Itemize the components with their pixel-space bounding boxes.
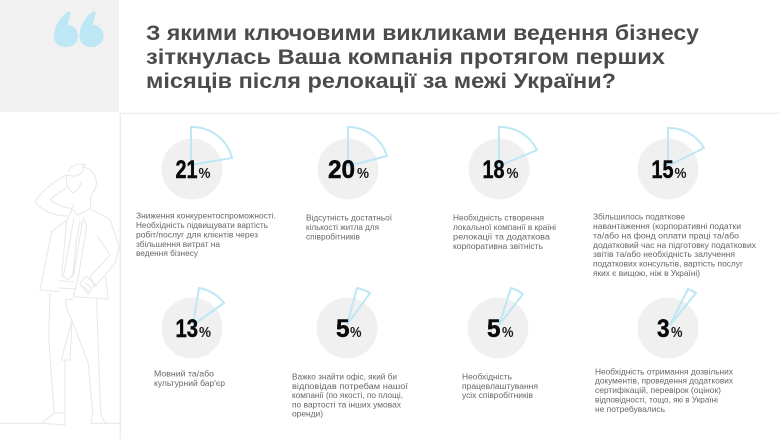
text block: 15%: додатковий час на підготовку податкових bbox=[593, 240, 757, 250]
chart: 15% sector over circle: % bbox=[674, 165, 686, 182]
text block: 5% office: по вартості та інших умовах bbox=[292, 400, 402, 410]
chart: 18% sector over circle: % bbox=[506, 165, 518, 182]
item: 15% bbox=[593, 128, 757, 278]
chart: 13% sector over circle: 13 bbox=[176, 315, 198, 343]
text block: 18%: Необхідність створення bbox=[453, 212, 544, 222]
text block: 5% employment bbox=[462, 372, 538, 400]
text block: 21% bbox=[136, 210, 276, 258]
text block: 5% office: Важко знайти офіс, який би bbox=[292, 372, 397, 382]
chart: 15% sector over circle: 15 bbox=[652, 156, 674, 184]
text block: 15% bbox=[593, 212, 757, 278]
chart: 13% sector over circle bbox=[162, 288, 224, 358]
text block: 13% bbox=[154, 368, 225, 388]
text block: 5% employment: Необхідність bbox=[462, 372, 513, 382]
text block: 18%: корпоративна звітність bbox=[453, 241, 544, 251]
text block: 3%: сертифікацій, перевірок (оцінок) bbox=[595, 385, 721, 395]
text block: 21%: Необхідність підвищувати вартість bbox=[136, 220, 269, 230]
chart: 18% sector over circle: 18 bbox=[482, 156, 505, 184]
text block: 5% office: компанії (по якості, по площі, bbox=[292, 390, 403, 400]
chart: 3% sector over circle: 3 bbox=[657, 315, 670, 343]
item: 18% bbox=[453, 127, 556, 251]
text block: 15%: яких є вищою, ніж в Україні) bbox=[593, 268, 700, 278]
text block: 15%: Збільшилось податкове bbox=[593, 212, 685, 222]
chart: 13% sector over circle: % bbox=[199, 324, 211, 341]
chart: 5% sector over circle bbox=[468, 288, 528, 358]
text block: 21%: Зниження конкурентоспроможності. bbox=[136, 210, 276, 220]
chart: 5% sector over circle: % bbox=[502, 324, 514, 341]
chart: 21% sector over circle: % bbox=[198, 165, 210, 182]
text block: 3% bbox=[595, 366, 734, 414]
chart: 3% sector over circle: % bbox=[671, 324, 682, 341]
text block: 15%: навантаження (корпоративні податки bbox=[593, 221, 741, 231]
title bbox=[146, 22, 699, 93]
chart: 5% sector over circle: 5 bbox=[336, 315, 350, 343]
chart: 20% sector over circle: 20 bbox=[328, 156, 355, 184]
icon: quotation marks bbox=[54, 11, 104, 47]
chart: 21% sector over circle bbox=[162, 127, 232, 200]
text block: 5% office: відповідав потребам нашої bbox=[292, 381, 409, 391]
text block: 18% bbox=[453, 212, 556, 251]
title: місяців після релокації за межі України? bbox=[146, 70, 616, 93]
item: 5% employment bbox=[462, 288, 538, 400]
chart: 20% sector over circle bbox=[318, 127, 387, 200]
text block: 3%: Необхідність отримання дозвільних bbox=[595, 366, 734, 376]
text block: 21%: ведення бізнесу bbox=[136, 248, 199, 258]
text block: 5% office: оренди) bbox=[292, 408, 323, 418]
text block: 5% employment: працевлаштування bbox=[462, 381, 538, 391]
chart: 20% sector over circle: % bbox=[357, 165, 369, 182]
chart: 18% sector over circle bbox=[468, 127, 537, 200]
chart: 3% sector over circle bbox=[638, 289, 698, 358]
text block: 18%: релокації та додаткова bbox=[453, 232, 550, 242]
text block: 3%: не потребувались bbox=[595, 404, 666, 414]
title: зіткнулась Ваша компанія протягом перших bbox=[146, 46, 665, 69]
item: 13% bbox=[154, 288, 225, 388]
text block: 18%: локальної компанії в країні bbox=[453, 222, 556, 232]
item: 21% bbox=[136, 127, 276, 258]
text block: 20% bbox=[306, 212, 393, 242]
chart: 21% sector over circle: 21 bbox=[176, 156, 198, 184]
header panel with quote mark bbox=[0, 0, 119, 112]
text block: 5% office bbox=[292, 372, 409, 418]
text block: 21%: робіт/послуг для клієнтів через bbox=[136, 230, 258, 240]
text block: 21%: збільшення витрат на bbox=[136, 239, 220, 249]
text block: 5% employment: усіх співробітників bbox=[462, 390, 534, 400]
text block: 3%: відповідності, тощо, які в Україні bbox=[595, 394, 718, 404]
text block: 15%: звітів та/або необхідність залучення bbox=[593, 249, 735, 259]
text block: 20%: співробітників bbox=[306, 232, 361, 242]
chart: 5% sector over circle: % bbox=[350, 324, 362, 341]
text block: 20%: Відсутність достатньої bbox=[306, 212, 393, 222]
text block: 20%: кількості житла для bbox=[306, 222, 379, 232]
chart: 5% sector over circle: 5 bbox=[487, 315, 501, 343]
item: 20% bbox=[306, 127, 393, 242]
text block: 3%: документів, проведення додаткових bbox=[595, 376, 734, 386]
text block: 13%: культурний бар'єр bbox=[154, 378, 225, 388]
title: З якими ключовими викликами ведення бізнесу bbox=[146, 22, 699, 45]
item: 3% bbox=[595, 289, 734, 414]
chart: 5% sector over circle bbox=[316, 288, 378, 358]
item: 5% office bbox=[292, 288, 409, 418]
text block: 13%: Мовний та/або bbox=[154, 368, 214, 378]
illustration: thinking man in a suit bbox=[0, 164, 119, 425]
chart: 15% sector over circle bbox=[638, 128, 704, 200]
text block: 15%: та/або на фонд оплати праці та/або bbox=[593, 230, 739, 240]
text block: 15%: податкових консультів, вартість послуг bbox=[593, 258, 743, 268]
